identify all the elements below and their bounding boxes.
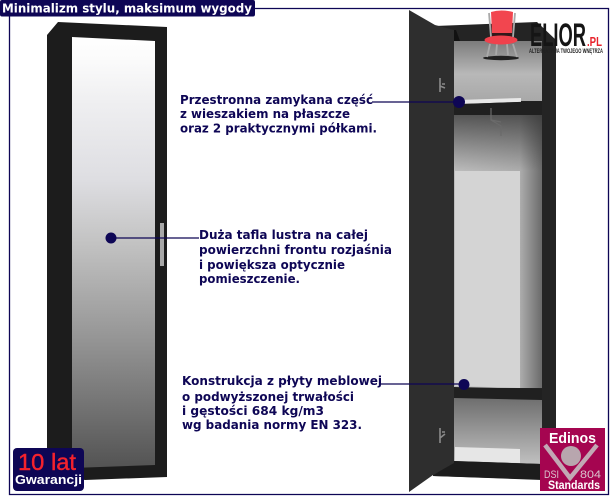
badge: Edinos Standards: Standards xyxy=(548,480,600,492)
open wardrobe xyxy=(409,10,556,492)
door hinge upper xyxy=(440,78,445,92)
lower compartment xyxy=(454,398,542,464)
badge: 10 year warranty xyxy=(13,448,84,491)
inner mirror panel xyxy=(455,171,520,388)
wardrobe body xyxy=(433,22,556,480)
upper compartment xyxy=(454,41,542,101)
top panel shadow xyxy=(440,30,460,41)
closed wardrobe with mirror xyxy=(47,22,167,480)
callout: mirror: i powiększa optycznie xyxy=(199,258,345,272)
callout: construction: o podwyższonej trwałości xyxy=(182,390,354,404)
callout: mirror xyxy=(106,228,392,286)
chair icon xyxy=(483,10,519,60)
door handle xyxy=(160,223,164,266)
logo: Elior.pl xyxy=(483,10,603,60)
callout: mirror: Duża tafla lustra na całej xyxy=(199,228,368,242)
callout: construction: i gęstości 684 kg/m3 xyxy=(182,404,324,418)
callout: construction: wg badania normy EN 323. xyxy=(182,418,362,432)
callout: construction xyxy=(182,374,470,432)
badge: Edinos Standards: 804 xyxy=(580,469,601,481)
door hinge lower xyxy=(440,428,445,443)
callout: mirror: pomieszczenie. xyxy=(199,272,300,286)
coat rail xyxy=(491,108,501,136)
badge: 10 year warranty: Gwarancji xyxy=(15,473,82,487)
badge: Edinos Standards: DSI xyxy=(544,469,559,481)
shelf xyxy=(441,101,542,115)
callout: closed compartment: Przestronna zamykana część xyxy=(180,93,373,107)
badge: Edinos Standards: Edinos xyxy=(549,430,596,447)
badge: Edinos Standards xyxy=(540,428,605,492)
hanging compartment xyxy=(454,115,542,388)
title banner: Minimalizm stylu, maksimum wygody xyxy=(2,2,252,16)
callout: closed compartment xyxy=(180,93,465,136)
open door xyxy=(409,10,454,492)
bottom panel xyxy=(433,461,542,480)
callout: closed compartment: oraz 2 praktycznymi półkami. xyxy=(180,122,377,136)
upper shelf top xyxy=(458,98,521,104)
mirror xyxy=(72,37,155,468)
callout: closed compartment: z wieszakiem na płaszcze xyxy=(180,107,350,121)
logo: Elior.pl: .PL xyxy=(587,34,602,49)
lower shelf xyxy=(454,387,542,400)
callout: construction: Konstrukcja z płyty meblowej xyxy=(182,374,382,388)
badge: 10 year warranty: 10 lat xyxy=(18,449,77,475)
callout: mirror: powierzchni frontu rozjaśnia xyxy=(199,243,392,257)
emblem xyxy=(545,445,597,478)
